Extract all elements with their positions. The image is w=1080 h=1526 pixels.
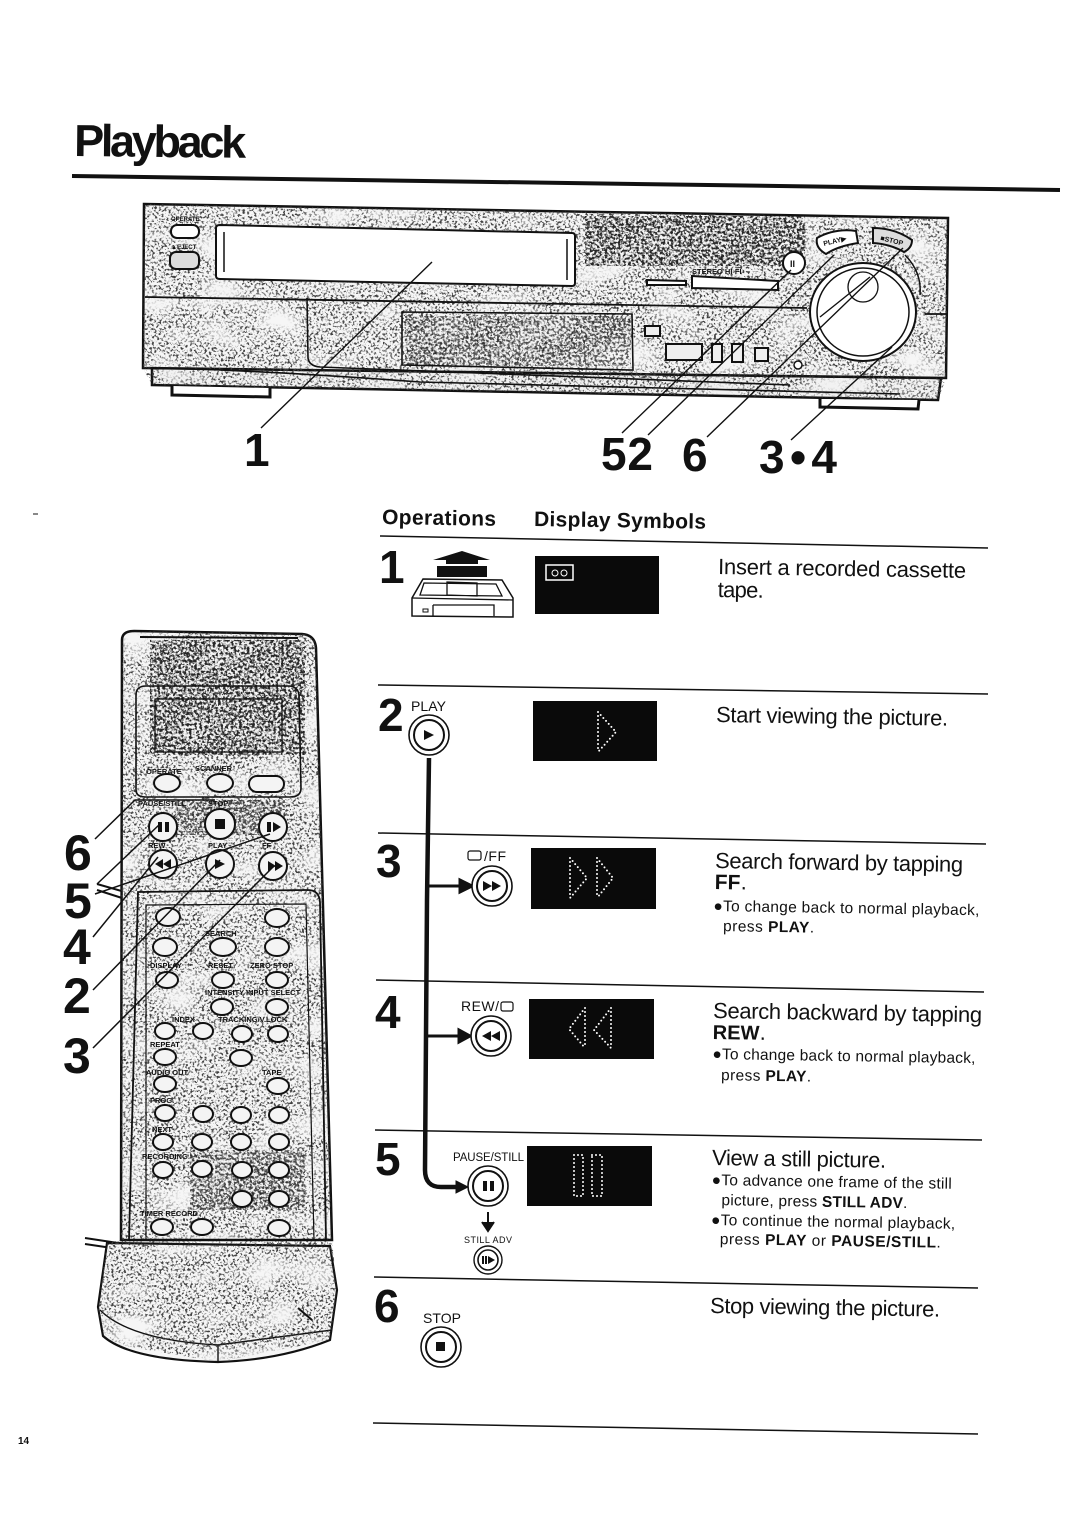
flap outline	[307, 298, 790, 385]
step 4 button	[471, 1016, 511, 1056]
key labels: SCANNER	[195, 764, 233, 773]
step 4 instruction	[712, 998, 982, 1088]
dark speckle middle	[175, 800, 285, 835]
still adv button	[474, 1246, 502, 1274]
key labels: TAPE	[262, 1068, 281, 1077]
rewind, play, ff keys	[149, 850, 287, 880]
key labels: FF	[262, 841, 272, 850]
step 3 instruction	[713, 848, 980, 939]
arrow to rew	[428, 1030, 470, 1042]
step 3 instruction: press PLAY.	[723, 918, 814, 937]
key labels: REPEAT	[150, 1040, 180, 1049]
power indicator	[794, 361, 802, 369]
lower curve	[152, 368, 900, 394]
key labels: INTENSITY	[205, 988, 244, 997]
step 4 instruction: .	[760, 1020, 766, 1045]
key labels: TRACKING/V.LOCK	[218, 1015, 288, 1024]
step 5 instruction: picture, press STILL ADV.	[721, 1192, 908, 1212]
row dividers	[373, 536, 988, 1434]
VCR callout 52: 52	[601, 428, 653, 480]
step 6 label: STOP	[423, 1310, 461, 1326]
step 2 button	[409, 715, 449, 755]
heading: Display Symbols: Display Symbols	[534, 508, 706, 534]
key labels: NEXT	[152, 1125, 172, 1134]
step 2 display	[533, 701, 657, 761]
step 5 instruction: View a still picture.	[712, 1145, 886, 1173]
remote callout 4: 4	[63, 919, 91, 975]
remote callout 5: 5	[64, 873, 92, 929]
key labels: PLAY	[208, 841, 227, 850]
step 4 instruction: REW	[713, 1022, 760, 1045]
step 3 label	[468, 848, 506, 864]
heading: Operations: Operations	[382, 506, 496, 531]
right foot	[820, 399, 919, 409]
step 1 instruction: tape.	[718, 577, 764, 603]
step 2 number: 2	[378, 689, 404, 741]
lower keys	[151, 908, 290, 1236]
pause glyph: II	[790, 259, 795, 269]
step 5 number: 5	[375, 1133, 401, 1185]
dial finger well	[848, 272, 878, 302]
operate label: OPERATE	[171, 217, 200, 223]
slot end marks	[224, 232, 567, 280]
key labels: PAUSE/STILL	[138, 799, 187, 808]
flap rim	[100, 1310, 332, 1362]
step 6 number: 6	[374, 1280, 400, 1332]
key labels: ZERO STOP	[250, 961, 293, 970]
page number: 14	[18, 1436, 30, 1447]
dial inner ring	[817, 268, 909, 356]
step 4 instruction: Search backward by tapping	[713, 998, 982, 1027]
dial	[810, 263, 916, 361]
panel dividing line	[145, 297, 947, 314]
step 2 instruction: Start viewing the picture.	[716, 702, 948, 731]
cassette slot	[216, 225, 575, 286]
step 3 instruction: .	[741, 869, 747, 895]
icon: cassette insert	[412, 551, 513, 617]
step 3 display	[531, 848, 656, 909]
left foot	[172, 386, 270, 397]
step 4 instruction: press PLAY.	[721, 1067, 811, 1086]
step 1 number: 1	[379, 541, 405, 593]
key panel frame	[129, 890, 326, 1240]
step 4 label: REW/	[461, 998, 499, 1014]
key labels: TIMER RECORD	[140, 1209, 198, 1218]
dark speckle lower	[190, 1150, 305, 1210]
step 5 label: PAUSE/STILL	[453, 1152, 525, 1164]
top highlight	[140, 637, 298, 638]
key labels: RECORDING	[142, 1152, 188, 1161]
VCR callout 6: 6	[682, 429, 708, 481]
step 1 instruction	[718, 554, 966, 606]
still adv label: STILL ADV	[464, 1235, 512, 1245]
remote flap	[98, 1243, 337, 1362]
audio block	[647, 276, 778, 290]
LCD surround	[136, 686, 301, 797]
transport buttons	[645, 326, 768, 362]
key labels: INPUT SELECT	[246, 988, 301, 997]
remote callout leader lines	[93, 800, 273, 1048]
step 3 instruction: Search forward by tapping	[715, 848, 963, 877]
step 5 instruction: ●To advance one frame of the still	[712, 1172, 952, 1193]
pause button	[783, 252, 805, 274]
key labels: DISPLAY	[150, 961, 182, 970]
remote speckle texture	[96, 628, 340, 1364]
step 1 display	[535, 556, 659, 614]
eject label: ▲EJECT	[171, 245, 197, 251]
arrow to still adv	[482, 1212, 494, 1231]
flap slot mark	[298, 1308, 312, 1320]
key labels: REW	[148, 841, 166, 850]
step 3 instruction: ●To change back to normal playback,	[713, 898, 980, 919]
dark speckle band display	[405, 316, 631, 366]
connector from play to ff, rew and pause	[425, 758, 458, 1187]
step 5 pause button	[468, 1166, 508, 1206]
VCR body	[143, 204, 948, 378]
key panel inner frame	[146, 904, 314, 1240]
VCR callout 3 and 4: 3•4	[759, 431, 837, 483]
key labels: AUDIO OUT	[146, 1068, 188, 1077]
key labels	[138, 764, 301, 1218]
stray mark	[33, 513, 38, 515]
step 3 label: /FF	[484, 848, 506, 864]
illustration: VCR front panel	[140, 200, 952, 409]
step 3 button	[472, 866, 512, 906]
step 5 instruction: press PLAY or PAUSE/STILL.	[720, 1231, 941, 1252]
step 4 display	[529, 999, 654, 1059]
arrow to ff	[429, 880, 472, 892]
remote cord	[85, 884, 125, 1248]
key labels: PROG.	[150, 1096, 174, 1105]
dial outer arc	[905, 255, 920, 295]
step 6 instruction: Stop viewing the picture.	[710, 1293, 940, 1322]
play button	[817, 230, 858, 254]
dark speckle band top right	[585, 216, 805, 266]
step 3 number: 3	[376, 835, 402, 887]
pause, stop, still adv keys	[149, 809, 287, 841]
step 1 instruction: Insert a recorded cassette	[718, 554, 966, 583]
block labels: STEREO HI-FI	[692, 267, 742, 276]
key labels: RESET	[208, 961, 233, 970]
step 3 instruction: FF	[715, 871, 741, 894]
step 4 instruction: ●To change back to normal playback,	[712, 1046, 976, 1067]
remote callout 3: 3	[63, 1028, 91, 1084]
step 4 number: 4	[375, 986, 401, 1038]
VCR callout 1: 1	[244, 424, 270, 476]
LCD window	[155, 699, 282, 752]
VCR speckle texture	[140, 200, 952, 404]
dark speckle top	[150, 640, 305, 755]
display window	[402, 312, 633, 370]
play button text: PLAY▶	[823, 235, 848, 248]
step 6 button	[421, 1327, 461, 1367]
operate button	[171, 225, 199, 238]
upper key row	[154, 774, 284, 792]
key labels: STOP	[208, 799, 228, 808]
illustration: remote control	[85, 628, 340, 1364]
key labels: OPERATE	[146, 767, 182, 776]
step 5 instruction: ●To continue the normal playback,	[711, 1212, 955, 1233]
key labels: SEARCH	[205, 929, 237, 938]
arrow to pause	[456, 1181, 468, 1193]
remote callout 2: 2	[63, 968, 91, 1024]
title: Playback	[74, 115, 247, 168]
key labels: INDEX	[172, 1015, 195, 1024]
step 5 instruction	[711, 1145, 956, 1252]
plinth and feet	[152, 368, 941, 400]
remote body	[121, 631, 332, 1240]
eject button	[170, 252, 199, 269]
stop button	[873, 228, 912, 252]
remote callout 6: 6	[64, 825, 92, 881]
step 2 label: PLAY	[411, 698, 447, 714]
VCR callout leader lines	[261, 248, 903, 440]
title rule	[72, 176, 1060, 190]
stop button text: ■STOP	[880, 235, 904, 248]
step 5 display	[527, 1146, 652, 1206]
